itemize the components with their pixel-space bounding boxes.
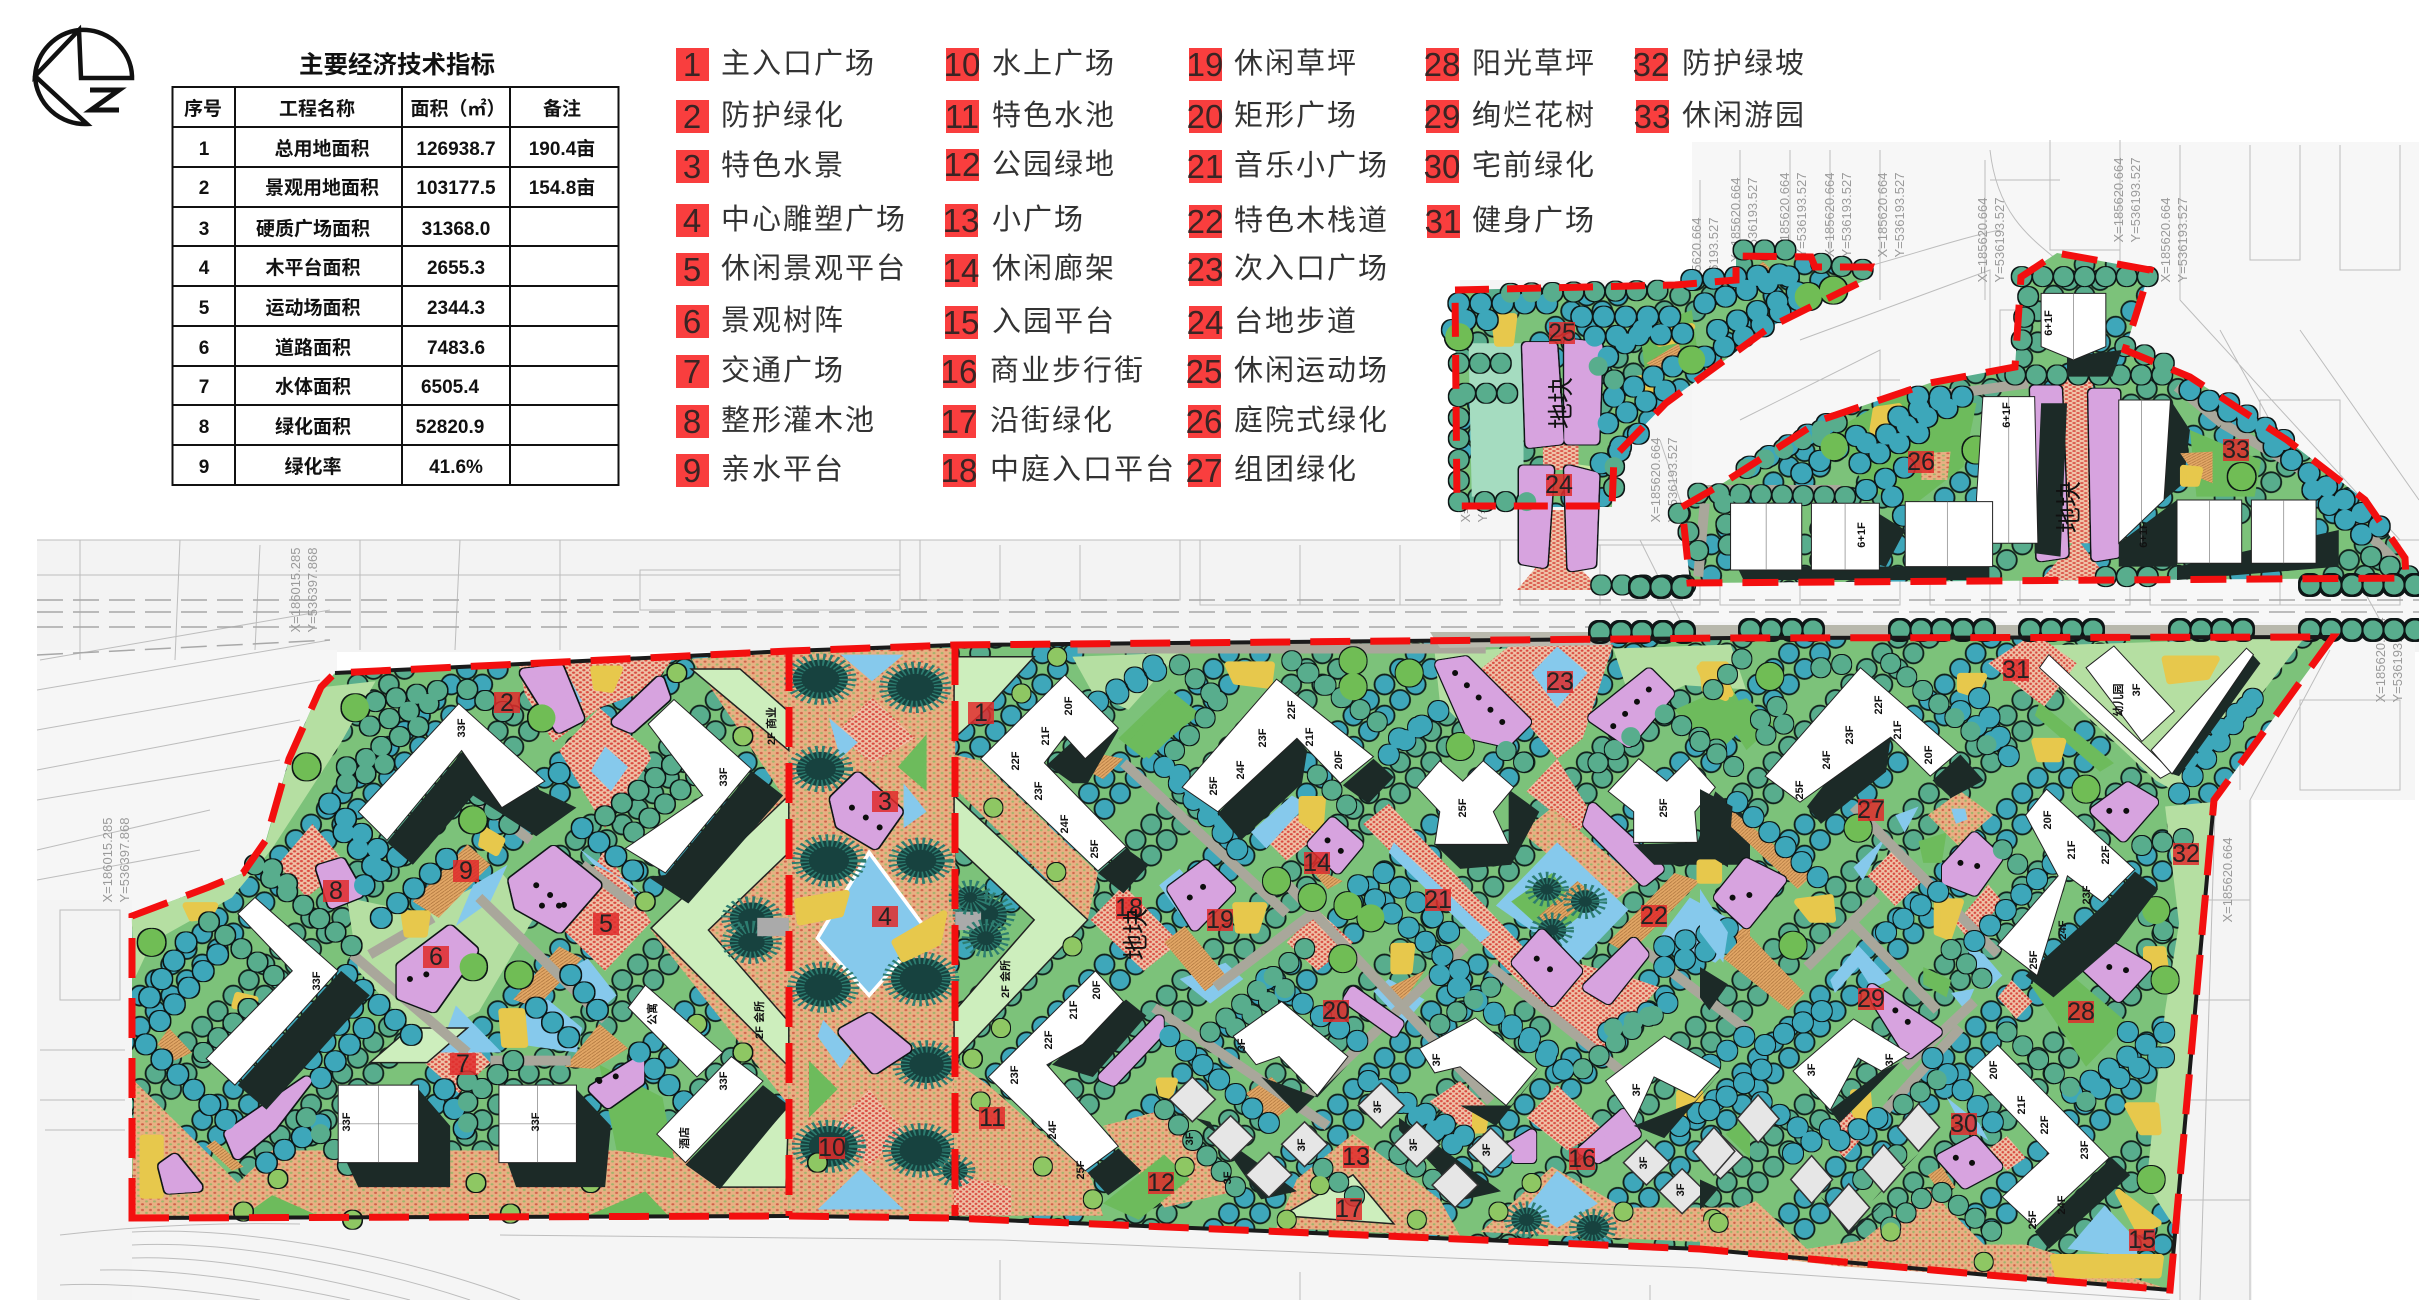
legend column 5: 32 (1633, 46, 1669, 83)
legend column 2: 12 (944, 146, 980, 183)
plot and building labels: 3F (1184, 1132, 1196, 1145)
rows: 运动场面积 (265, 297, 361, 319)
plot and building labels: 23F (1033, 781, 1045, 800)
coordinates text: Y=536193.527 (1665, 438, 1680, 522)
map number markers: 21 (1424, 886, 1452, 914)
map number markers: 18 (1115, 894, 1143, 922)
legend column 3: 音乐小广场 (1234, 149, 1389, 182)
map number markers: 10 (818, 1134, 846, 1162)
legend column 3: 20 (1187, 98, 1223, 135)
rows: 154.8亩 (529, 177, 595, 199)
coordinates text: Y=536397.868 (305, 548, 320, 632)
map number markers: 24 (1545, 471, 1573, 499)
rows: 绿化率 (284, 456, 342, 478)
rows: 126938.7 (416, 139, 496, 160)
coordinates text: X=185620.664 (2220, 838, 2235, 922)
legend column 3: 休闲草坪 (1234, 47, 1358, 80)
map number markers: 12 (1147, 1169, 1175, 1197)
plot and building labels: 33F (311, 971, 323, 990)
coordinates text: Y=536193.527 (2175, 198, 2190, 282)
legend column 4: 30 (1424, 148, 1460, 185)
legend column 2: 小广场 (992, 203, 1085, 236)
map number markers: 27 (1857, 796, 1885, 824)
plot and building labels: 3F (1408, 1138, 1420, 1151)
header row (184, 97, 581, 120)
north-west parcel plan (1452, 250, 2410, 590)
plot and building labels: 地块 (2054, 481, 2084, 533)
rows: 水体面积 (275, 376, 351, 398)
coordinates text: Y=536397.868 (117, 818, 132, 902)
west parcel plan (132, 648, 1007, 1220)
rows: 41.6% (429, 457, 483, 478)
plot and building labels: 3F (1806, 1063, 1818, 1076)
plot and building labels: 22F (1286, 700, 1298, 719)
rows: 7483.6 (427, 338, 485, 359)
rows: 103177.5 (416, 178, 496, 199)
legend column 2: 17 (941, 403, 977, 440)
legend column 1: 休闲景观平台 (721, 252, 907, 285)
plot and building labels: 20F (1063, 696, 1075, 715)
legend column 4: 绚烂花树 (1472, 99, 1596, 132)
coordinates text: X=185620.664 (2373, 618, 2388, 702)
map number markers: 19 (1206, 906, 1234, 934)
north-east parcel plan (1693, 633, 2305, 1288)
table title: 主要经济技术指标 (299, 51, 495, 79)
rows: 木平台面积 (265, 256, 361, 279)
legend column 5: 防护绿坡 (1682, 47, 1806, 80)
map number markers: 4 (878, 903, 892, 931)
legend column 2: 10 (944, 46, 980, 83)
legend column 4: 宅前绿化 (1472, 149, 1596, 182)
coordinates text: X=185620.664 (1728, 178, 1743, 262)
north parcels base (1455, 253, 2406, 583)
plot and building labels: 23F (1009, 1065, 1021, 1084)
header row: 序号 (184, 97, 222, 120)
legend column 1: 4 (683, 202, 701, 239)
legend column 1: 2 (683, 98, 701, 135)
plot and building labels: 25F (1457, 798, 1469, 817)
plot and building labels: 22F (1873, 695, 1885, 714)
coordinates text: Y=536193.527 (2390, 618, 2405, 702)
plot and building labels: 21F (2016, 1095, 2028, 1114)
map number markers: 5 (599, 910, 613, 938)
legend column 4 (1424, 46, 1596, 240)
coordinates text: X=185620.664 (2111, 158, 2126, 242)
rows: 8 (199, 417, 209, 438)
plot and building labels: 3F (1372, 1100, 1384, 1113)
legend column 3: 庭院式绿化 (1234, 404, 1389, 437)
legend column 5: 休闲游园 (1682, 99, 1806, 132)
coordinates text (100, 158, 2405, 922)
legend column 1: 5 (683, 251, 701, 288)
plot and building labels: 24F (1235, 760, 1247, 779)
coordinates text: Y=536193.527 (1745, 178, 1760, 262)
plot and building labels: 2F 会所 (998, 960, 1012, 998)
plot and building labels: 3F (1481, 1143, 1493, 1156)
coordinates text: X=185620.664 (1875, 173, 1890, 257)
coordinates text: X=185620.664 (1975, 198, 1990, 282)
plot and building labels: 24F (2056, 1195, 2068, 1214)
rows: 道路面积 (275, 336, 351, 359)
legend column 2: 商业步行街 (990, 354, 1145, 387)
plot and building labels: 25F (1658, 798, 1670, 817)
coordinates text: X=186015.285 (100, 818, 115, 902)
legend column 2: 公园绿地 (992, 148, 1116, 181)
map number markers: 29 (1857, 985, 1885, 1013)
coordinates text: X=185620.664 (1458, 438, 1473, 522)
rows: 4 (199, 258, 210, 279)
map number markers: 30 (1950, 1110, 1978, 1138)
legend column 2: 特色水池 (992, 99, 1116, 132)
map number markers: 23 (1546, 668, 1574, 696)
rows: 9 (199, 457, 209, 478)
plot and building labels: 24F (1059, 814, 1071, 833)
coordinates text: X=185620.664 (2158, 198, 2173, 282)
plot and building labels: 25F (1794, 780, 1806, 799)
map number markers: 16 (1568, 1145, 1596, 1173)
plot and building labels (311, 310, 2150, 1229)
legend column 3: 24 (1187, 304, 1223, 341)
plot and building labels: 3F (1222, 1171, 1234, 1184)
map number markers: 22 (1640, 902, 1668, 930)
plot and building labels: 3F (2131, 683, 2143, 696)
coordinates text: Y=536193.527 (1706, 218, 1721, 302)
legend column 4: 29 (1424, 98, 1460, 135)
rows: 2 (199, 178, 209, 199)
coordinates text: Y=536193.527 (1475, 438, 1490, 522)
legend column 4: 28 (1424, 46, 1460, 83)
plot and building labels: 22F (2100, 845, 2112, 864)
plot and building labels: 24F (1047, 1120, 1059, 1139)
plot and building labels: 20F (1091, 980, 1103, 999)
plot and building labels: 33F (718, 767, 730, 786)
rows: 硬质广场面积 (256, 217, 370, 240)
plot and building labels: 21F (1040, 726, 1052, 745)
central and east parcel plan (942, 644, 1750, 1244)
legend column 1: 7 (683, 353, 701, 390)
legend column 3: 23 (1187, 251, 1223, 288)
legend column 4: 31 (1425, 203, 1461, 240)
map number markers: 33 (2222, 436, 2250, 464)
plot and building labels: 33F (530, 1112, 542, 1131)
coordinates text: Y=536193.527 (1892, 173, 1907, 257)
plot and building labels: 33F (341, 1112, 353, 1131)
plot and building labels: 20F (1923, 745, 1935, 764)
coordinates text: X=186015.285 (288, 548, 303, 632)
plot and building labels: 3F (1675, 1183, 1687, 1196)
legend column 2: 11 (945, 98, 979, 135)
legend column 2 (941, 46, 1176, 489)
plot and building labels: 22F (1043, 1030, 1055, 1049)
legend column 1: 1 (683, 46, 701, 83)
map number markers: 8 (329, 877, 343, 905)
legend column 2: 14 (943, 252, 979, 289)
logo (35, 30, 132, 124)
main site base (132, 637, 2333, 1290)
coordinates text: X=185620.664 (1689, 218, 1704, 302)
legend column 1: 9 (683, 452, 701, 489)
map number markers: 14 (1303, 849, 1331, 877)
plot and building labels: 23F (1844, 725, 1856, 744)
plot and building labels: 2F 会所 (752, 1001, 766, 1039)
legend column 2: 水上广场 (992, 47, 1116, 80)
legend column 2: 13 (943, 202, 979, 239)
rows: 总用地面积 (274, 138, 370, 160)
rows: 31368.0 (422, 219, 490, 240)
map number markers: 13 (1342, 1143, 1370, 1171)
rows: 2655.3 (427, 258, 485, 279)
legend column 1: 6 (683, 303, 701, 340)
coordinates text: Y=536193.527 (2128, 158, 2143, 242)
legend column 3: 22 (1187, 203, 1223, 240)
plot and building labels: 2F 商业 (764, 707, 778, 745)
plot and building labels: 20F (1988, 1060, 2000, 1079)
legend column 1: 防护绿化 (721, 99, 845, 132)
plot and building labels: 21F (1304, 727, 1316, 746)
legend column 1: 景观树阵 (721, 304, 845, 337)
legend column 1: 交通广场 (721, 354, 845, 387)
coordinates text: Y=536193.527 (1794, 173, 1809, 257)
rows: 2344.3 (427, 298, 485, 319)
road paving strip (1430, 625, 2419, 648)
legend column 3: 矩形广场 (1234, 99, 1358, 132)
legend column 4: 阳光草坪 (1472, 47, 1596, 80)
plot and building labels: 24F (1821, 750, 1833, 769)
coordinates text: Y=536193.527 (1992, 198, 2007, 282)
legend column 1: 8 (683, 403, 701, 440)
coordinates text: Y=536193.527 (1839, 173, 1854, 257)
table: economic indicators (172, 87, 619, 485)
legend column 5 (1633, 46, 1806, 135)
legend column 3: 21 (1187, 148, 1223, 185)
plot and building labels: 公寓 (645, 1003, 659, 1025)
rows: 景观用地面积 (265, 177, 379, 199)
rows: 绿化面积 (275, 416, 351, 438)
legend column 5: 33 (1634, 98, 1670, 135)
plot and building labels: 3F (1296, 1138, 1308, 1151)
plot and building labels: 20F (2042, 810, 2054, 829)
map number markers: 15 (2128, 1226, 2156, 1254)
plot and building labels: 23F (2081, 885, 2093, 904)
rows: 52820.9 (416, 417, 484, 438)
plot and building labels: 25F (2027, 1210, 2039, 1229)
plot and building labels: 25F (2028, 950, 2040, 969)
legend column 1 (676, 46, 907, 489)
plot and building labels: 22F (1010, 751, 1022, 770)
plot and building labels: 22F (2039, 1115, 2051, 1134)
legend column 1: 3 (683, 148, 701, 185)
plot and building labels: 24F (2057, 920, 2069, 939)
legend column 3: 休闲运动场 (1234, 354, 1389, 387)
plot and building labels: 地块 (1546, 377, 1576, 429)
plot and building labels: 地块 (1121, 908, 1151, 960)
rows: 6505.4 (421, 377, 479, 398)
plot and building labels: 33F (456, 718, 468, 737)
map number markers: 6 (429, 943, 443, 971)
rows (199, 138, 595, 478)
red boundary dashes (132, 253, 2406, 1290)
map number markers: 2 (500, 689, 514, 717)
legend column 2: 18 (941, 452, 977, 489)
map number markers: 11 (979, 1104, 1005, 1132)
road tree row (1600, 585, 2419, 632)
map number markers: 32 (2172, 840, 2200, 868)
plot and building labels: 23F (2079, 1140, 2091, 1159)
plot and building labels: 21F (2066, 840, 2078, 859)
header row: 备注 (543, 98, 581, 120)
plot and building labels: 6+1F (1856, 522, 1868, 548)
legend column 1: 主入口广场 (721, 47, 876, 80)
map number markers: 9 (459, 857, 473, 885)
rows: 5 (199, 298, 210, 319)
map number markers: 3 (878, 788, 892, 816)
legend column 3: 次入口广场 (1234, 252, 1389, 285)
plot and building labels: 6+1F (2001, 402, 2013, 428)
rows: 3 (199, 219, 209, 240)
legend column 2: 中庭入口平台 (990, 453, 1176, 486)
rows: 190.4亩 (529, 138, 595, 160)
rows: 1 (199, 139, 210, 160)
legend column 3 (1186, 46, 1389, 489)
legend column 2: 休闲廊架 (992, 252, 1116, 285)
legend column 2: 沿街绿化 (990, 404, 1114, 437)
plot and building labels: 25F (1208, 776, 1220, 795)
plot and building labels: 3F (1638, 1156, 1650, 1169)
legend column 3: 25 (1186, 353, 1222, 390)
plot and building labels: 6+1F (2138, 522, 2150, 548)
legend column 3: 台地步道 (1234, 305, 1358, 338)
legend column 3: 19 (1187, 46, 1223, 83)
plot and building labels: 25F (1075, 1160, 1087, 1179)
plot and building labels: 6+1F (2043, 310, 2055, 336)
legend column 3: 特色木栈道 (1234, 204, 1389, 237)
coordinates text: X=185620.664 (1648, 438, 1663, 522)
legend column 1: 亲水平台 (721, 453, 845, 486)
map number markers: 25 (1548, 319, 1576, 347)
header row: 面积（㎡） (410, 98, 506, 120)
legend column 4: 健身广场 (1472, 204, 1596, 237)
header row: 工程名称 (279, 98, 355, 120)
plot and building labels: 酒店 (677, 1127, 691, 1149)
map number markers (323, 319, 2250, 1254)
map number markers: 31 (2002, 656, 2030, 684)
map number markers: 28 (2067, 998, 2095, 1026)
plot and building labels: 25F (1089, 839, 1101, 858)
legend column 2: 15 (943, 304, 979, 341)
map number markers: 20 (1322, 997, 1350, 1025)
plot and building labels: 幼儿园 (2111, 684, 2125, 716)
map number markers: 1 (974, 699, 988, 727)
plot and building labels: 20F (1333, 750, 1345, 769)
plot and building labels: 3F (1236, 1038, 1248, 1051)
rows: 7 (199, 377, 209, 398)
legend column 1: 整形灌木池 (721, 404, 876, 437)
plot and building labels: 3F (1884, 1053, 1896, 1066)
map number markers: 7 (456, 1050, 470, 1078)
legend column 3: 组团绿化 (1234, 453, 1358, 486)
coordinates text: X=185620.664 (1822, 173, 1837, 257)
legend column 1: 中心雕塑广场 (721, 203, 907, 236)
rows: 6 (199, 338, 209, 359)
plot and building labels: 21F (1068, 1000, 1080, 1019)
plot and building labels: 3F (1631, 1083, 1643, 1096)
legend column 2: 入园平台 (992, 305, 1116, 338)
legend column 3: 26 (1186, 403, 1222, 440)
plot and building labels: 23F (1257, 728, 1269, 747)
map number markers: 17 (1335, 1195, 1363, 1223)
plot and building labels: 3F (1431, 1053, 1443, 1066)
legend column 1: 特色水景 (721, 149, 845, 182)
legend column 2: 16 (941, 353, 977, 390)
coordinates text: X=185620.664 (1777, 173, 1792, 257)
plot and building labels: 21F (1892, 720, 1904, 739)
plot and building labels: 33F (718, 1071, 730, 1090)
legend column 3: 27 (1186, 452, 1222, 489)
map number markers: 26 (1907, 448, 1935, 476)
